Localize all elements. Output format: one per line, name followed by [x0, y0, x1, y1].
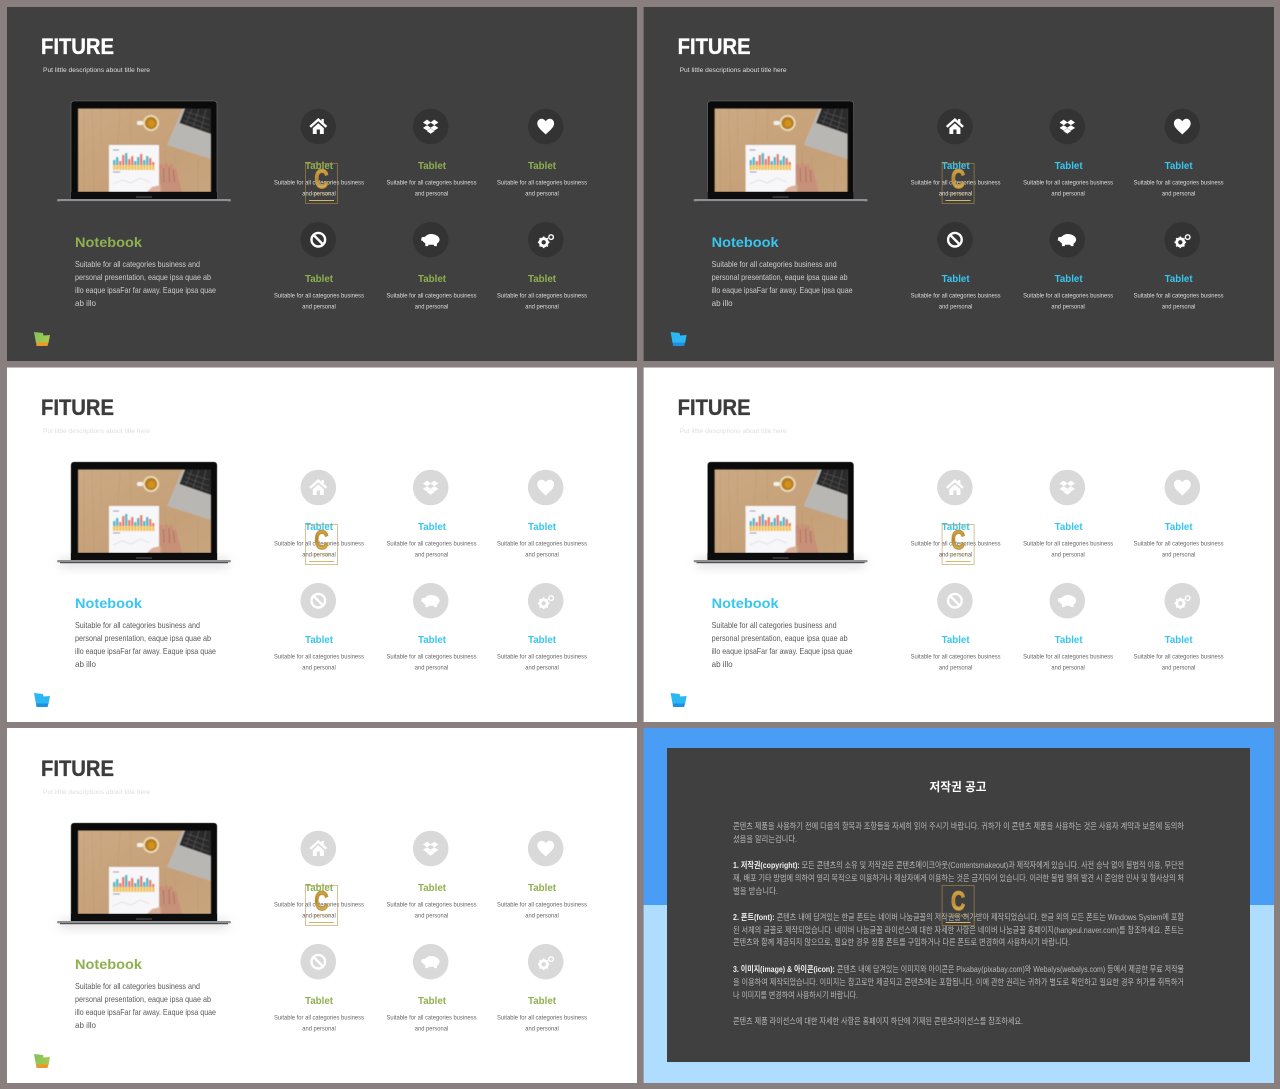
feature: ban: Suitable for all categories business [274, 292, 364, 300]
feature: heart: Suitable for all categories business [1134, 540, 1224, 548]
body text: Suitable for all categories business and [712, 620, 837, 630]
feature: gears [1134, 222, 1224, 310]
logo mark [34, 332, 50, 346]
intro paragraph [733, 821, 1184, 844]
feature: heart: Suitable for all categories business [497, 902, 587, 908]
feature: home: Tablet [305, 883, 334, 894]
feature: dropbox [1023, 109, 1113, 198]
feature: piggy bank: Tablet [418, 635, 447, 646]
heading: Notebook: Notebook [75, 234, 142, 250]
feature: home [274, 470, 364, 558]
feature: dropbox: and personal [415, 190, 448, 198]
body text [75, 620, 216, 669]
feature: gears: and personal [1162, 664, 1195, 672]
body text: ab illo [712, 298, 733, 308]
body text: ab illo [75, 298, 96, 308]
feature: ban [911, 222, 1001, 310]
laptop image [694, 462, 868, 563]
feature: heart: and personal [1162, 190, 1195, 198]
feature: heart: and personal [525, 552, 559, 558]
feature: heart: Tablet [528, 522, 557, 533]
feature: dropbox: Suitable for all categories business [386, 902, 476, 908]
subtitle: Put little descriptions about title here [43, 789, 150, 796]
feature: home: Tablet [942, 522, 970, 533]
body text [75, 981, 216, 1030]
feature: gears: Suitable for all categories business [1134, 292, 1224, 300]
heading: Notebook: Notebook [75, 956, 142, 972]
notice title: 저작권 공고 [930, 779, 986, 794]
panel: white green slide [7, 728, 637, 1083]
body text: personal presentation, eaque ipsa quae ab [712, 272, 848, 282]
feature: gears: and personal [525, 664, 559, 672]
feature: gears [1134, 583, 1224, 672]
body text [712, 259, 853, 308]
subtitle: Put little descriptions about title here [680, 67, 787, 74]
subtitle: Put little descriptions about title here [43, 67, 150, 74]
feature: piggy bank [386, 222, 476, 310]
feature: dropbox: Tablet [1055, 522, 1083, 533]
feature: heart: and personal [525, 190, 559, 198]
feature: dropbox: and personal [1051, 190, 1085, 198]
body text: illo eaque ipsaFar far away. Eaque ipsa quae [75, 1007, 216, 1017]
closing note: 콘텐츠 제품 라이선스에 대한 자세한 사항은 홈페이지 하단에 기재된 콘텐츠라이선스를 참조하세요. [733, 1016, 1023, 1026]
font paragraph: 된 서체의 글꼴로 제작되었습니다. 네이버 나눔글꼴 라이선스에 대한 자세한 사항은 네이버 나눔글꼴 홈페이지(hangeul.naver.com)를 참조하세요. 폰트는 [733, 925, 1184, 935]
feature: gears: Suitable for all categories business [497, 1014, 587, 1022]
feature: piggy bank: Suitable for all categories business [386, 654, 476, 660]
watermark [942, 164, 974, 204]
feature: dropbox: Suitable for all categories business [1023, 180, 1113, 186]
heading: Notebook: Notebook [712, 234, 779, 250]
feature: gears: Suitable for all categories business [1134, 654, 1224, 660]
feature: dropbox: and personal [415, 912, 448, 920]
body text: Suitable for all categories business and [712, 259, 837, 269]
feature: ban [274, 944, 364, 1032]
feature: ban: and personal [939, 664, 972, 672]
watermark [306, 164, 338, 204]
feature: piggy bank: and personal [415, 664, 448, 672]
body text: illo eaque ipsaFar far away. Eaque ipsa quae [75, 646, 216, 656]
feature: heart: Suitable for all categories business [1134, 180, 1224, 186]
feature: ban: Tablet [942, 274, 970, 285]
feature: home: and personal [939, 552, 972, 558]
feature: dropbox: Tablet [418, 883, 447, 894]
laptop image [694, 101, 868, 202]
watermark [942, 524, 974, 564]
feature: heart: Suitable for all categories business [497, 180, 587, 186]
feature: gears: and personal [525, 1026, 559, 1032]
laptop shadow [60, 559, 228, 567]
intro paragraph: 콘텐츠 제품을 사용하기 전에 다음의 항목과 조항들을 자세히 읽어 주시기 바랍니다. 귀하가 이 콘텐츠 제품을 사용하는 것은 사용자 계약과 보증에 동의하 [733, 821, 1184, 831]
feature: heart [1134, 109, 1224, 198]
feature: ban: Suitable for all categories business [911, 292, 1001, 300]
feature: ban: and personal [302, 664, 336, 672]
feature: heart: Tablet [528, 883, 557, 894]
body text: personal presentation, eaque ipsa quae ab [75, 633, 211, 643]
feature: heart: Tablet [1165, 161, 1193, 172]
panel: dark green slide [7, 7, 637, 361]
watermark [306, 886, 338, 926]
body text: ab illo [75, 1020, 96, 1030]
feature: heart [497, 831, 587, 920]
feature: home [911, 470, 1001, 558]
feature: dropbox: Suitable for all categories business [386, 540, 476, 548]
feature: dropbox: Suitable for all categories business [1023, 540, 1113, 548]
body text: personal presentation, eaque ipsa quae ab [712, 633, 848, 643]
feature: dropbox: and personal [1051, 552, 1085, 558]
feature: piggy bank: and personal [1051, 664, 1085, 672]
feature: gears: Tablet [528, 635, 557, 646]
logo mark [671, 332, 687, 346]
copyright paragraph: 재, 배포 기타 방법에 의하여 영리 목적으로 이용하거나 제삼자에게 이용하는 것은 금지되어 있습니다. 이러한 불법 행위 발견 시 준엄한 민사 및 형사상의 처 [733, 873, 1184, 883]
body text: illo eaque ipsaFar far away. Eaque ipsa quae [712, 285, 853, 295]
subtitle: Put little descriptions about title here [680, 428, 787, 435]
heading: Notebook: Notebook [75, 595, 142, 611]
image and icon paragraph: 을 이용하여 제작되었습니다. 이미지는 참고로만 제공되고 콘텐츠에는 포함됩니다. 이에 관한 권리는 귀하가 별도로 확인하고 필요한 경우 허가를 취득하거 [733, 977, 1184, 987]
feature: dropbox [1023, 470, 1113, 558]
logo mark [671, 693, 687, 707]
feature: home: Tablet [305, 522, 334, 533]
feature: gears: and personal [525, 304, 559, 310]
feature: piggy bank: Tablet [1055, 274, 1083, 285]
feature: gears: and personal [1162, 304, 1195, 310]
feature: dropbox: Tablet [418, 161, 447, 172]
feature: heart: Suitable for all categories business [497, 540, 587, 548]
image and icon paragraph: 나 이미지를 변경하여 사용하시기 바랍니다. [733, 990, 858, 1000]
feature: piggy bank: Suitable for all categories business [386, 292, 476, 300]
feature: heart [497, 470, 587, 558]
laptop image [57, 101, 231, 202]
laptop shadow [60, 920, 228, 928]
copyright paragraph [733, 860, 1184, 896]
copyright paragraph: 1. 저작권(copyright): 모든 콘텐츠의 소유 및 저작권은 콘텐츠메이크아웃(Contentsmakeout)과 제작자에게 있습니다. 사전 승낙 없이 불법적 이용, 무단전 [733, 860, 1184, 870]
feature: ban: Tablet [942, 635, 970, 646]
feature: ban [274, 222, 364, 310]
title: FITURE [41, 34, 114, 59]
body text: personal presentation, eaque ipsa quae ab [75, 272, 211, 282]
title: FITURE [678, 34, 751, 59]
body text: Suitable for all categories business and [75, 981, 200, 991]
copyright paragraph: 벌을 받습니다. [733, 886, 778, 896]
feature: home: Suitable for all categories business [911, 540, 1001, 548]
feature: home: and personal [939, 190, 972, 198]
feature: ban: Suitable for all categories business [274, 654, 364, 660]
feature: heart [1134, 470, 1224, 558]
feature: gears: Suitable for all categories business [497, 654, 587, 660]
feature: heart: Tablet [528, 161, 557, 172]
body text: Suitable for all categories business and [75, 620, 200, 630]
feature: home: and personal [302, 912, 336, 920]
body text: illo eaque ipsaFar far away. Eaque ipsa quae [75, 285, 216, 295]
feature: heart [497, 109, 587, 198]
font paragraph: 콘텐츠와 함께 제공되지 않으므로, 필요한 경우 정품 폰트를 구입하거나 다른 폰트로 변경하여 사용하시기 바랍니다. [733, 937, 1070, 947]
intro paragraph: 셨음을 알리는겁니다. [733, 834, 797, 844]
title: FITURE [678, 395, 751, 420]
feature: piggy bank: and personal [415, 1026, 448, 1032]
logo mark [34, 1054, 50, 1068]
feature: ban [911, 583, 1001, 672]
feature: gears [497, 222, 587, 310]
image and icon paragraph [733, 964, 1184, 1000]
feature: home [274, 109, 364, 198]
feature: home: and personal [302, 190, 336, 198]
feature: gears: Tablet [528, 996, 557, 1007]
feature: gears: Tablet [1165, 274, 1193, 285]
feature: ban [274, 583, 364, 672]
feature: piggy bank: Suitable for all categories business [1023, 654, 1113, 660]
feature: ban: Suitable for all categories business [911, 654, 1001, 660]
feature: dropbox: and personal [415, 552, 448, 558]
feature: home: Tablet [305, 161, 334, 172]
feature: home: Suitable for all categories business [274, 540, 364, 548]
panel: dark cyan slide [644, 7, 1274, 361]
feature: piggy bank: and personal [415, 304, 448, 310]
body text [75, 259, 216, 308]
feature: ban: and personal [939, 304, 972, 310]
feature: piggy bank: Suitable for all categories business [1023, 292, 1113, 300]
panel: copyright notice [644, 728, 1274, 1083]
watermark [306, 524, 338, 564]
feature: piggy bank [386, 944, 476, 1032]
body text: ab illo [712, 659, 733, 669]
feature: home [911, 109, 1001, 198]
feature: piggy bank: Tablet [418, 996, 447, 1007]
feature: ban: Tablet [305, 996, 334, 1007]
panel: white cyan slide left [7, 368, 637, 722]
feature: home [274, 831, 364, 920]
feature: dropbox: Tablet [1055, 161, 1083, 172]
laptop shadow [697, 559, 865, 567]
feature: piggy bank: Suitable for all categories business [386, 1014, 476, 1022]
feature: piggy bank: Tablet [1055, 635, 1083, 646]
feature: dropbox [386, 470, 476, 558]
feature: gears [497, 944, 587, 1032]
feature: dropbox: Suitable for all categories business [386, 180, 476, 186]
feature: heart: Tablet [1165, 522, 1193, 533]
feature: ban: and personal [302, 1026, 336, 1032]
feature: heart: and personal [1162, 552, 1195, 558]
watermark [942, 886, 974, 926]
feature: home: Suitable for all categories business [274, 180, 364, 186]
feature: ban: Tablet [305, 274, 334, 285]
feature: dropbox [386, 831, 476, 920]
panel: white cyan slide right [644, 368, 1274, 722]
feature: piggy bank [386, 583, 476, 672]
laptop image [57, 823, 231, 924]
body text: ab illo [75, 659, 96, 669]
feature: dropbox [386, 109, 476, 198]
feature: home: Suitable for all categories business [911, 180, 1001, 186]
title: FITURE [41, 395, 114, 420]
body text [712, 620, 853, 669]
feature: heart: and personal [525, 912, 559, 920]
feature: ban: Suitable for all categories business [274, 1014, 364, 1022]
feature: gears: Suitable for all categories business [497, 292, 587, 300]
feature: gears: Tablet [528, 274, 557, 285]
feature: gears [497, 583, 587, 672]
image and icon paragraph: 3. 이미지(image) & 아이콘(icon): 콘텐츠 내에 담겨있는 이미지와 아이콘은 Pixabay(pixabay.com)와 Webalys(webalys.com) 등에서 제공한 무료 저작물 [733, 964, 1184, 974]
feature: ban: and personal [302, 304, 336, 310]
font paragraph [733, 912, 1184, 947]
subtitle: Put little descriptions about title here [43, 428, 150, 435]
feature: piggy bank: and personal [1051, 304, 1085, 310]
feature: ban: Tablet [305, 635, 334, 646]
font paragraph: 2. 폰트(font): 콘텐츠 내에 담겨있는 한글 폰트는 네이버 나눔글꼴의 저작권을 허가받아 제작되었습니다. 한글 외의 모든 폰트는 Windows System에 포함 [733, 912, 1184, 922]
feature: home: Suitable for all categories business [274, 902, 364, 908]
feature: dropbox: Tablet [418, 522, 447, 533]
feature: piggy bank: Tablet [418, 274, 447, 285]
feature: home: Tablet [942, 161, 970, 172]
body text: Suitable for all categories business and [75, 259, 200, 269]
feature: piggy bank [1023, 583, 1113, 672]
feature: home: and personal [302, 552, 336, 558]
feature: gears: Tablet [1165, 635, 1193, 646]
title: FITURE [41, 756, 114, 781]
body text: illo eaque ipsaFar far away. Eaque ipsa quae [712, 646, 853, 656]
feature: piggy bank [1023, 222, 1113, 310]
logo mark [34, 693, 50, 707]
body text: personal presentation, eaque ipsa quae ab [75, 994, 211, 1004]
heading: Notebook: Notebook [712, 595, 779, 611]
laptop image [57, 462, 231, 563]
